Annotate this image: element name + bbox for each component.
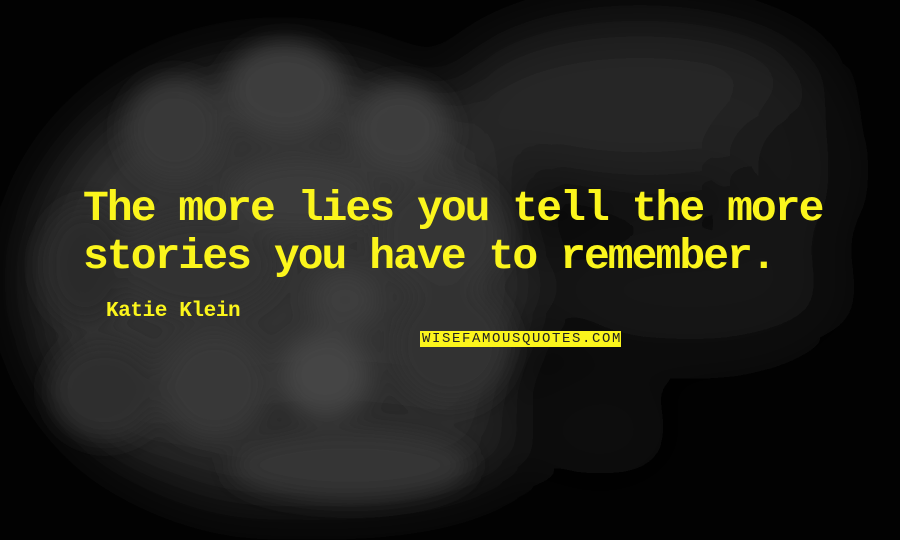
- logo: wisefamousquotes badge: WISEFAMOUSQUOTES.COM: [422, 331, 621, 347]
- quote line 2: stories you have to remember.: [83, 232, 775, 281]
- author: Katie Klein: [106, 300, 240, 323]
- quote line 1: The more lies you tell the more: [83, 184, 822, 233]
